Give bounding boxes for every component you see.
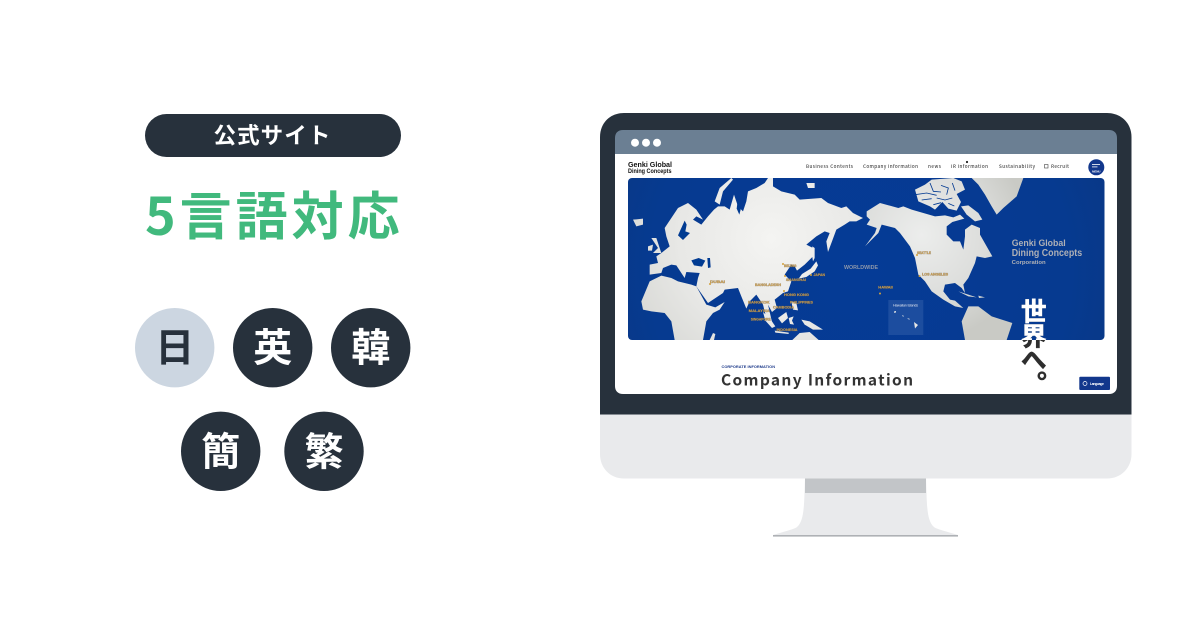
site navigation xyxy=(806,161,1069,170)
Eurasia xyxy=(650,178,863,325)
browser title bar xyxy=(615,130,1117,154)
menu button xyxy=(1088,159,1104,175)
Japan xyxy=(799,261,818,279)
map place labels: WORLDWIDE xyxy=(844,265,879,271)
language: English: 英 xyxy=(253,318,292,374)
hero world map xyxy=(628,178,1105,340)
badge: official site: 公式サイト xyxy=(213,118,332,150)
Australia xyxy=(792,332,819,340)
tagline white layer over map: 界 xyxy=(1021,316,1047,354)
browser page area xyxy=(615,154,1117,394)
Cuba xyxy=(958,291,977,297)
map place labels: DUBAI xyxy=(710,280,725,284)
map place labels: MALAYSIA xyxy=(749,309,770,313)
Sumatra xyxy=(763,312,775,328)
Java xyxy=(775,331,789,334)
site logo: Dining Concepts xyxy=(628,169,672,175)
map place labels: HONG KONG xyxy=(784,293,809,297)
language: Traditional Chinese xyxy=(284,412,364,491)
map place labels: HAWAII xyxy=(878,286,893,290)
tagline dark layer xyxy=(1021,292,1063,386)
Hawaiian Islands inset xyxy=(888,300,923,335)
Arctic islands xyxy=(806,183,815,188)
site logo: Genki Global xyxy=(628,160,672,169)
Hispaniola xyxy=(978,296,985,298)
tagline white layer over map: 世 xyxy=(1021,292,1047,328)
language: Korean: 韓 xyxy=(351,318,390,374)
map place labels: LOS ANGELES xyxy=(922,272,948,276)
site navigation: Business Contents xyxy=(806,163,854,170)
language button xyxy=(1079,377,1110,390)
wordmark on map: Genki Global xyxy=(1012,238,1066,249)
monitor stand xyxy=(773,478,958,537)
Arctic channels xyxy=(915,183,955,206)
wordmark on map: Dining Concepts xyxy=(1012,248,1083,259)
language: Korean xyxy=(331,308,410,387)
Britain xyxy=(651,238,661,253)
South America xyxy=(962,306,1012,340)
wordmark on map xyxy=(1012,238,1083,266)
map place labels: PHILIPPINES xyxy=(790,300,813,304)
site navigation: Sustainability xyxy=(999,163,1036,170)
Philippines xyxy=(791,301,798,310)
Sakhalin xyxy=(812,246,815,261)
Madagascar xyxy=(710,333,715,340)
language circles xyxy=(135,308,410,491)
tagline white layer over map xyxy=(1021,298,1046,340)
map place labels: BANGKOK xyxy=(748,300,770,304)
tagline dark layer: 。 xyxy=(1037,349,1063,386)
Hawaiian Islands inset: Hawaiian Islands xyxy=(893,304,918,308)
tagline dark layer: 世 xyxy=(1021,292,1047,328)
Ireland xyxy=(648,245,653,251)
Iceland xyxy=(633,219,643,226)
map place labels: INDONESIA xyxy=(776,328,798,332)
map place labels: CAMBODIA xyxy=(773,306,794,310)
section heading: Company Information xyxy=(721,368,913,390)
badge: official site xyxy=(145,114,401,157)
desktop monitor xyxy=(600,113,1132,537)
browser window xyxy=(615,130,1117,394)
map place labels xyxy=(709,251,948,332)
monitor chin xyxy=(600,414,1132,478)
landmasses: Americas and Greenland xyxy=(865,178,1023,340)
site navigation: IR Information xyxy=(951,163,988,170)
monitor bezel xyxy=(600,113,1132,414)
language: Traditional Chinese: 繁 xyxy=(304,421,344,477)
map place labels: BEIJING xyxy=(784,264,797,268)
tagline dark layer: へ xyxy=(1021,340,1047,377)
vertical tagline xyxy=(1021,298,1046,380)
Africa xyxy=(641,276,725,340)
map place labels: SINGAPORE xyxy=(751,318,771,322)
North America xyxy=(865,203,992,308)
language: Simplified Chinese xyxy=(181,412,260,491)
wordmark on map: Corporation xyxy=(1012,260,1046,266)
map place labels: SHANGHAI xyxy=(786,278,806,282)
Novaya Zemlya xyxy=(715,178,733,205)
language: English xyxy=(233,308,312,387)
Greenland xyxy=(972,178,1023,215)
tagline dark layer: 界 xyxy=(1021,316,1047,354)
site navigation: Recruit xyxy=(1051,163,1069,170)
map place labels: BANGLADESH xyxy=(755,283,781,287)
section eyebrow: CORPORATE INFORMATION xyxy=(722,364,775,369)
landmasses: Europe, Asia, Africa xyxy=(633,178,863,340)
heading: five language support: 5言語対応 xyxy=(145,175,404,250)
Sulawesi xyxy=(789,316,794,325)
site navigation: news xyxy=(928,164,942,170)
menu button: MENU xyxy=(1092,170,1100,174)
map place labels: JAPAN xyxy=(814,273,825,277)
Canadian Arctic islands xyxy=(915,178,965,211)
language: Japanese (active) xyxy=(135,308,214,387)
language: Japanese (active): 日 xyxy=(155,318,194,374)
site logo xyxy=(628,160,672,175)
inland seas xyxy=(678,198,741,268)
Borneo xyxy=(778,312,788,323)
New Guinea xyxy=(801,320,823,330)
language button: Language xyxy=(1090,382,1104,386)
site navigation: Company Information xyxy=(863,163,918,170)
language: Simplified Chinese: 簡 xyxy=(201,421,240,477)
map place labels: SEATTLE xyxy=(917,251,931,255)
Baffin Island xyxy=(961,205,982,221)
